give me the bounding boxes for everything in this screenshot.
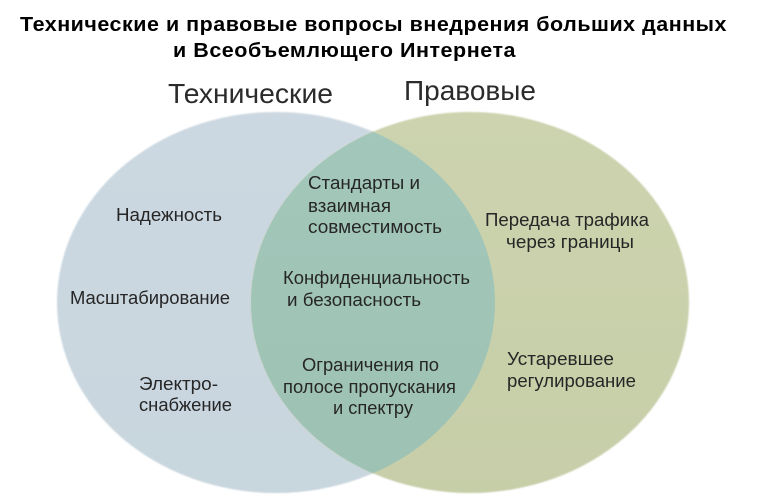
labels: technical issues: Электро- [139, 373, 218, 394]
labels: legal issues: регулирование [507, 370, 636, 391]
labels: technical issues [70, 204, 232, 415]
labels: legal issues: Передача трафика [485, 209, 650, 230]
heading: legal: Правовые [404, 75, 536, 106]
labels: shared issues: совместимость [308, 216, 442, 237]
labels: shared issues: и безопасность [287, 289, 421, 310]
title [20, 13, 727, 62]
labels: technical issues: Масштабирование [70, 287, 230, 308]
labels: shared issues: и спектру [333, 397, 414, 418]
labels: shared issues: Конфиденциальность [283, 267, 470, 288]
labels: legal issues [485, 209, 650, 391]
labels: legal issues: Устаревшее [507, 348, 614, 369]
labels: shared issues: взаимная [308, 195, 391, 216]
circle: technical [57, 112, 495, 493]
labels: shared issues: Стандарты и [308, 172, 420, 193]
circle: legal [251, 112, 689, 493]
heading: technical: Технические [168, 78, 333, 109]
labels: legal issues: через границы [506, 231, 634, 252]
title: Технические и правовые вопросы внедрения больших данных [20, 13, 727, 36]
labels: shared issues: полосе пропускания [283, 376, 456, 397]
labels: technical issues: Надежность [116, 204, 222, 225]
labels: shared issues [283, 172, 470, 418]
title: и Всеобъемлющего Интернета [173, 39, 516, 62]
overlap: shared area [251, 132, 495, 474]
labels: technical issues: снабжение [139, 394, 232, 415]
labels: shared issues: Ограничения по [302, 354, 439, 375]
